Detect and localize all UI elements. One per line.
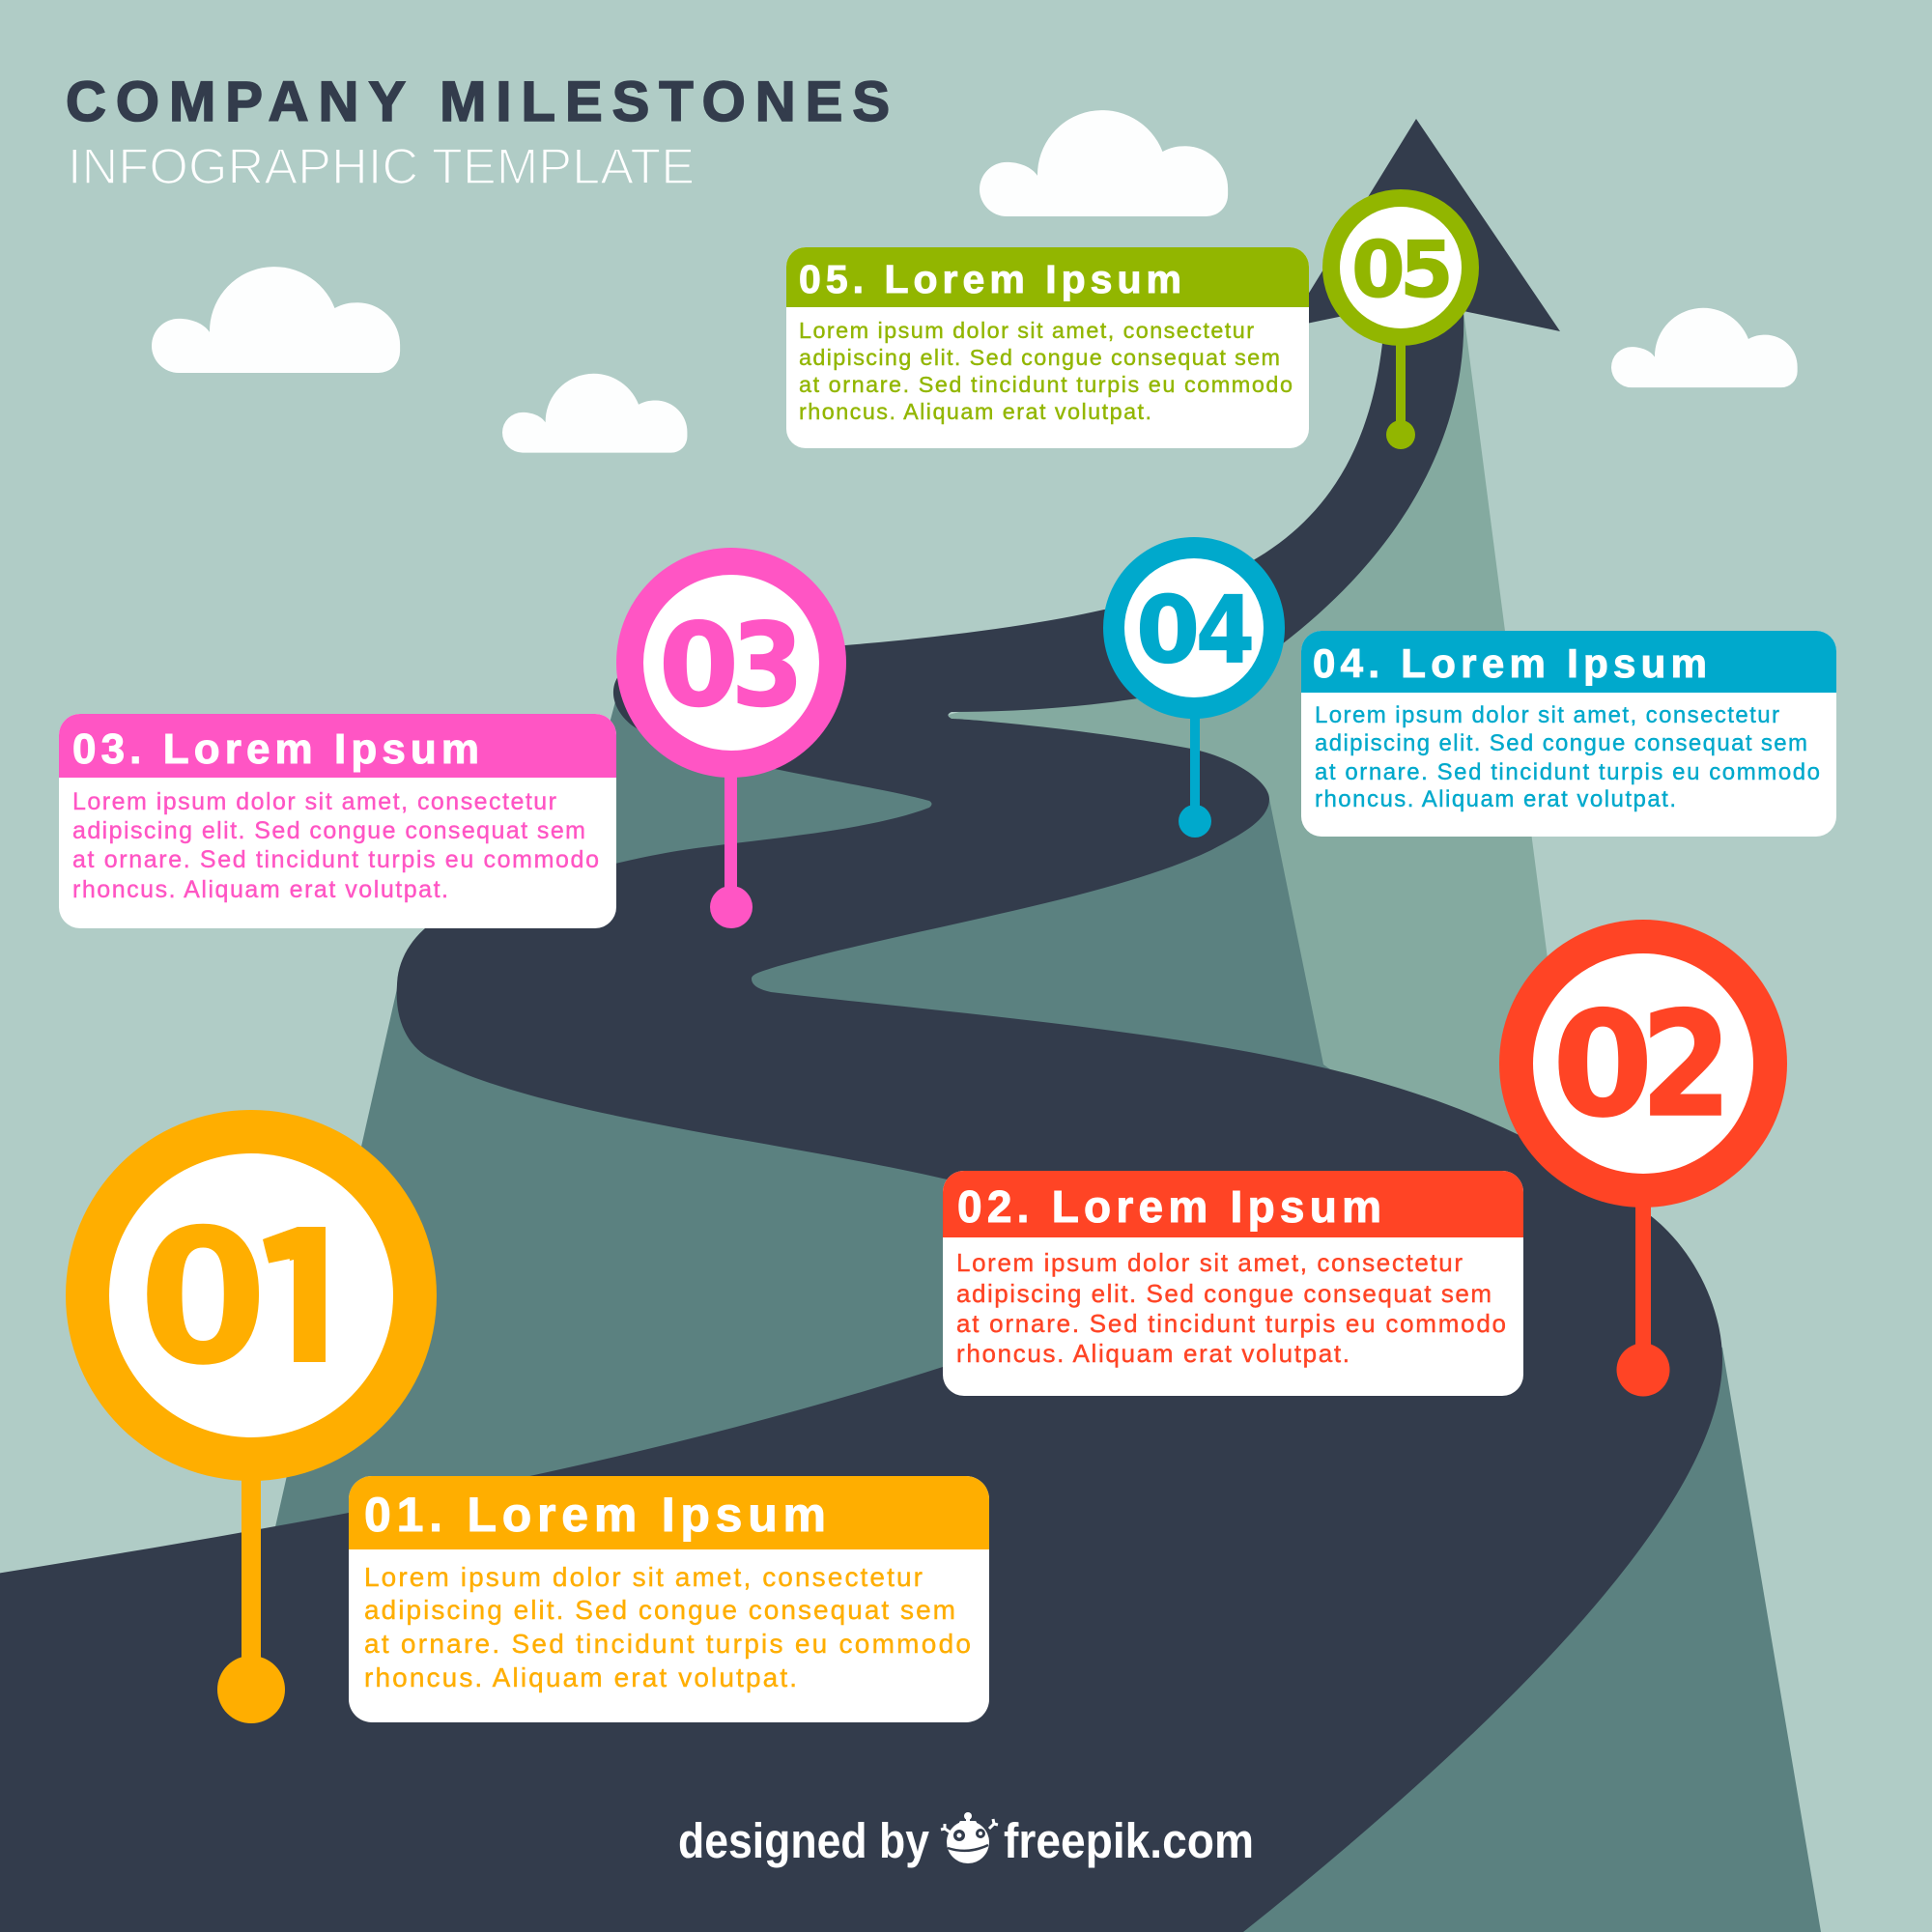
pin 05: 0: [1351, 225, 1406, 315]
credit: designed by: designed by: [678, 1813, 930, 1868]
front mountain: [274, 691, 1821, 1932]
pin 05: 5: [1400, 225, 1454, 315]
panel 02: 02. Lorem Ipsum: [957, 1181, 1381, 1232]
panel 03: [59, 714, 616, 928]
panel 01: [349, 1476, 989, 1722]
subtitle: INFOGRAPHIC TEMPLATE: [68, 139, 695, 195]
panel 02: rhoncus. Aliquam erat volutpat.: [956, 1339, 1350, 1368]
pin 03: [616, 548, 846, 928]
panel 02: adipiscing elit. Sed congue consequat sem: [956, 1279, 1492, 1308]
panel 01: Lorem ipsum dolor sit amet, consectetur: [364, 1562, 923, 1592]
pin 05: [1322, 189, 1479, 449]
panel 03: at ornare. Sed tincidunt turpis eu commodo: [72, 846, 599, 873]
pin 04: [1103, 537, 1285, 838]
panel 04: adipiscing elit. Sed congue consequat sem: [1315, 730, 1807, 756]
pin 01: 1: [243, 1192, 371, 1406]
pin 02: 2: [1640, 981, 1732, 1150]
panel 05: rhoncus. Aliquam erat volutpat.: [799, 399, 1151, 424]
panel 01: adipiscing elit. Sed congue consequat sem: [364, 1595, 955, 1625]
pin 03: 0: [659, 600, 739, 733]
panel 04: rhoncus. Aliquam erat volutpat.: [1315, 786, 1676, 812]
panel 05: at ornare. Sed tincidunt turpis eu commodo: [799, 372, 1293, 397]
panel 02: Lorem ipsum dolor sit amet, consectetur: [956, 1248, 1463, 1277]
panel 05: adipiscing elit. Sed congue consequat sem: [799, 345, 1280, 370]
panel 02: at ornare. Sed tincidunt turpis eu commodo: [956, 1309, 1506, 1338]
pin 01: [66, 1110, 437, 1723]
panel 03: rhoncus. Aliquam erat volutpat.: [72, 876, 448, 903]
panel 01: 01. Lorem Ipsum: [364, 1488, 826, 1542]
panel 05: 05. Lorem Ipsum: [799, 257, 1181, 301]
panel 03: Lorem ipsum dolor sit amet, consectetur: [72, 788, 556, 815]
panel 04: Lorem ipsum dolor sit amet, consectetur: [1315, 702, 1779, 728]
panel 05: [786, 247, 1309, 448]
credit: freepik.com: freepik.com: [1004, 1813, 1254, 1868]
panel 04: at ornare. Sed tincidunt turpis eu commodo: [1315, 759, 1820, 785]
pin 04: 4: [1196, 578, 1255, 684]
pin 03: 3: [731, 600, 804, 733]
pin 02: [1499, 920, 1787, 1397]
pin 04: 0: [1136, 578, 1200, 684]
icon: freepik robot: [941, 1812, 998, 1863]
panel 04: 04. Lorem Ipsum: [1313, 640, 1707, 686]
panel 03: 03. Lorem Ipsum: [72, 725, 479, 773]
panel 02: [943, 1171, 1523, 1396]
panel 01: rhoncus. Aliquam erat volutpat.: [364, 1662, 797, 1692]
panel 05: Lorem ipsum dolor sit amet, consectetur: [799, 318, 1254, 343]
panel 03: adipiscing elit. Sed congue consequat sem: [72, 817, 585, 844]
cloud: top: [980, 110, 1228, 216]
pin 01: 0: [138, 1189, 268, 1406]
panel 01: at ornare. Sed tincidunt turpis eu commodo: [364, 1629, 971, 1659]
cloud: middle: [502, 374, 687, 453]
title: COMPANY MILESTONES: [66, 71, 890, 133]
cloud: left: [152, 267, 400, 373]
cloud: right: [1611, 308, 1798, 387]
pin 02: 0: [1552, 981, 1653, 1150]
panel 04: [1301, 631, 1836, 837]
back mountain: [949, 311, 1584, 1236]
